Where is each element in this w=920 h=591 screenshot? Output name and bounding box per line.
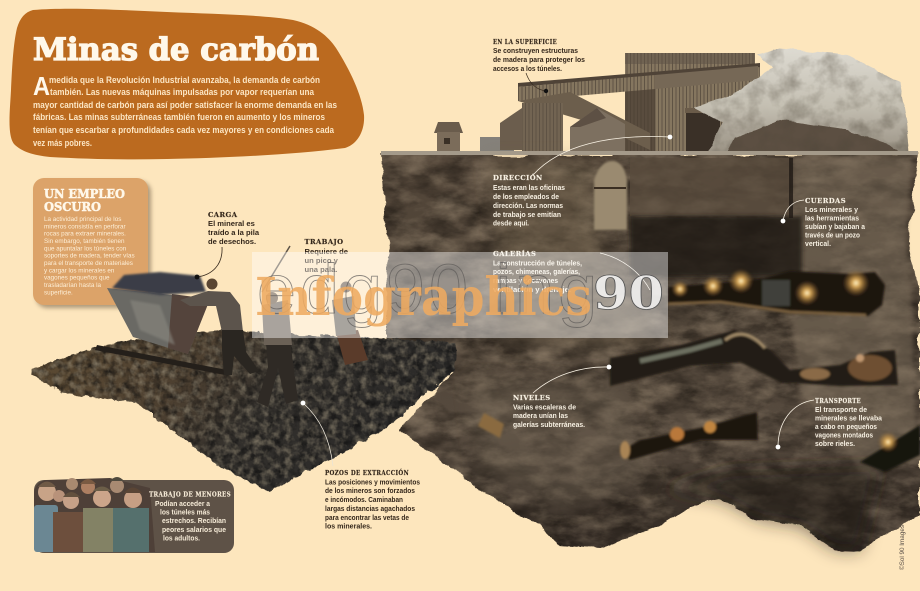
panel: un empleo oscuro (33, 178, 151, 308)
label: cuerdas: Los minerales y (805, 205, 859, 214)
sidebar text: para el transporte de materiales (44, 260, 133, 267)
label: dirección: Estas eran las oficinas (493, 183, 565, 192)
label: galerías (493, 249, 650, 294)
sidebar text (44, 216, 135, 296)
caption (149, 490, 231, 542)
label: trabajo (304, 238, 348, 274)
illustration: surface ground slab (31, 330, 457, 492)
icon: small hut (434, 122, 463, 151)
miner with pick (257, 246, 298, 407)
label: galerías: pozos, chimeneas, galerías, (493, 267, 580, 276)
label: cuerdas (781, 197, 866, 248)
label: carga (195, 211, 260, 279)
tunnel: lower gallery (478, 412, 920, 472)
label: carga: traído a la pila (208, 228, 260, 237)
intro text: mayor cantidad de carbón para así poder satisfacer la enorme demanda en las (33, 100, 337, 111)
label: trabajo: Requiere de (304, 247, 348, 256)
sidebar text: superficie. (44, 289, 73, 296)
label: transporte: vagones montados (815, 430, 873, 440)
intro text: A (33, 71, 50, 101)
panel: trabajo de menores (34, 477, 234, 553)
label: en la superficie: Se construyen estructuras (493, 46, 578, 55)
label: galerías: La construcción de túneles, (493, 258, 582, 268)
intro text: vez más pobres. (33, 138, 92, 149)
label: dirección: DIRECCIÓN (493, 173, 543, 182)
panel: un empleo oscuro: OSCURO (44, 199, 101, 214)
label: en la superficie (493, 38, 585, 93)
illustration: surface buildings (434, 53, 760, 154)
intro text: también. Las nuevas máquinas impulsadas por vapor requerían una (50, 87, 315, 98)
label: carga: de desechos. (208, 237, 256, 246)
tunnel: middle gallery (610, 330, 898, 386)
label: pozos de extracción: de los mineros son forzados (325, 486, 415, 495)
label: pozos de extracción: para encontrar las vetas de (325, 513, 409, 522)
label: trabajo: una pala. (304, 265, 337, 274)
label: transporte (776, 397, 883, 449)
caption: estrechos. Recibían (162, 516, 226, 525)
title: Minas de carbón (33, 32, 319, 68)
label: niveles: madera unían las (513, 411, 568, 420)
leader: pozos de extracción (301, 401, 333, 466)
label: transporte: sobre rieles. (815, 439, 855, 448)
miner loading cart (180, 278, 259, 375)
label: cuerdas: subían y bajaban a (805, 222, 866, 231)
label: niveles: galerías subterráneas. (513, 420, 585, 429)
label: trabajo: TRABAJO (304, 238, 343, 246)
watermark: Infographics (255, 267, 592, 328)
label: cuerdas: través de un pozo (805, 230, 860, 240)
label: pozos de extracción (325, 468, 420, 530)
sidebar heading: UN EMPLEO (44, 186, 125, 201)
label: pozos de extracción: e incómodos. Caminaban (325, 495, 403, 504)
sidebar text: vagones pequeños que (44, 275, 110, 282)
label: transporte: TRANSPORTE (815, 397, 861, 405)
sidebar text: rocas para extraer minerales. (44, 231, 126, 238)
photo: child miners (34, 477, 155, 552)
label: galerías: GALERÍAS (493, 249, 536, 258)
label: pozos de extracción: largas distancias agachados (325, 504, 415, 513)
label: en la superficie: EN LA SUPERFICIE (493, 38, 557, 46)
caption: los adultos. (163, 534, 200, 542)
sidebar text: soportes de madera, tender vías (44, 253, 135, 260)
intro text: fábricas. Las minas subterráneas también fueron en aumento y los mineros (33, 112, 325, 123)
credit: ©Sol 90 Images (899, 525, 906, 570)
illustration: rock pile (693, 48, 910, 153)
watermark: edg90 ing (257, 250, 597, 328)
miner with shovel (332, 282, 368, 365)
label: cuerdas: vertical. (805, 239, 831, 248)
intro text: tenían que escarbar a profundidades cada vez mayores y en condiciones cada (33, 125, 335, 136)
label: cuerdas: las herramientas (805, 214, 859, 222)
label: dirección (493, 135, 672, 228)
sidebar text: mineros consistía en perforar (44, 223, 126, 230)
caption: los túneles más (160, 508, 210, 516)
label: dirección: de los empleados de (493, 192, 559, 201)
label: galerías: rampas y socavones (493, 276, 558, 285)
label: transporte: El transporte de (815, 405, 867, 414)
label: en la superficie: accesos a los túneles. (493, 64, 562, 73)
label: trabajo: un pico y (304, 256, 339, 265)
label: cuerdas: CUERDAS (805, 197, 846, 205)
label: transporte: minerales se llevaba (815, 414, 883, 422)
label: pozos de extracción: los minerales. (325, 522, 372, 530)
illustration: cross-section of the mine (381, 151, 920, 551)
intro text (33, 71, 337, 149)
sidebar text: La actividad principal de los (44, 216, 121, 223)
watermark: 90 (593, 266, 664, 320)
sidebar text: que apuntalar los túneles con (44, 245, 127, 252)
intro text: medida que la Revolución Industrial avanzaba, la demanda de carbón (49, 75, 320, 86)
label: niveles (513, 365, 611, 429)
caption: Podían acceder a (155, 499, 211, 508)
panel: intro (10, 9, 364, 159)
label: dirección: dirección. Las normas (493, 201, 563, 210)
label: dirección: de trabajo se emitían (493, 210, 561, 219)
label: en la superficie: de madera para proteger los (493, 55, 585, 64)
label: niveles: NIVELES (513, 394, 551, 402)
label: carga: CARGA (208, 211, 238, 219)
label: dirección: desde aquí. (493, 218, 529, 228)
label: transporte: a cabo en pequeños (815, 422, 877, 431)
illustration: miners (180, 246, 368, 407)
sidebar text: Sin embargo, también tienen (44, 238, 125, 245)
sidebar text: trasladarían hasta la (44, 282, 102, 289)
sidebar text: y cargar los minerales en (44, 267, 115, 274)
tunnel: upper gallery (668, 269, 885, 316)
caption: peores salarios que (162, 525, 226, 534)
label: carga: El mineral es (208, 219, 255, 228)
caption: TRABAJO DE MENORES (149, 490, 231, 498)
label: galerías: ventilación y drenaje. (493, 285, 571, 294)
label: niveles: Varias escaleras de (513, 402, 576, 412)
label: pozos de extracción: Las posiciones y movimientos (325, 478, 420, 486)
label: pozos de extracción: POZOS DE EXTRACCIÓN (325, 468, 409, 477)
illustration: mining cart (95, 272, 227, 375)
